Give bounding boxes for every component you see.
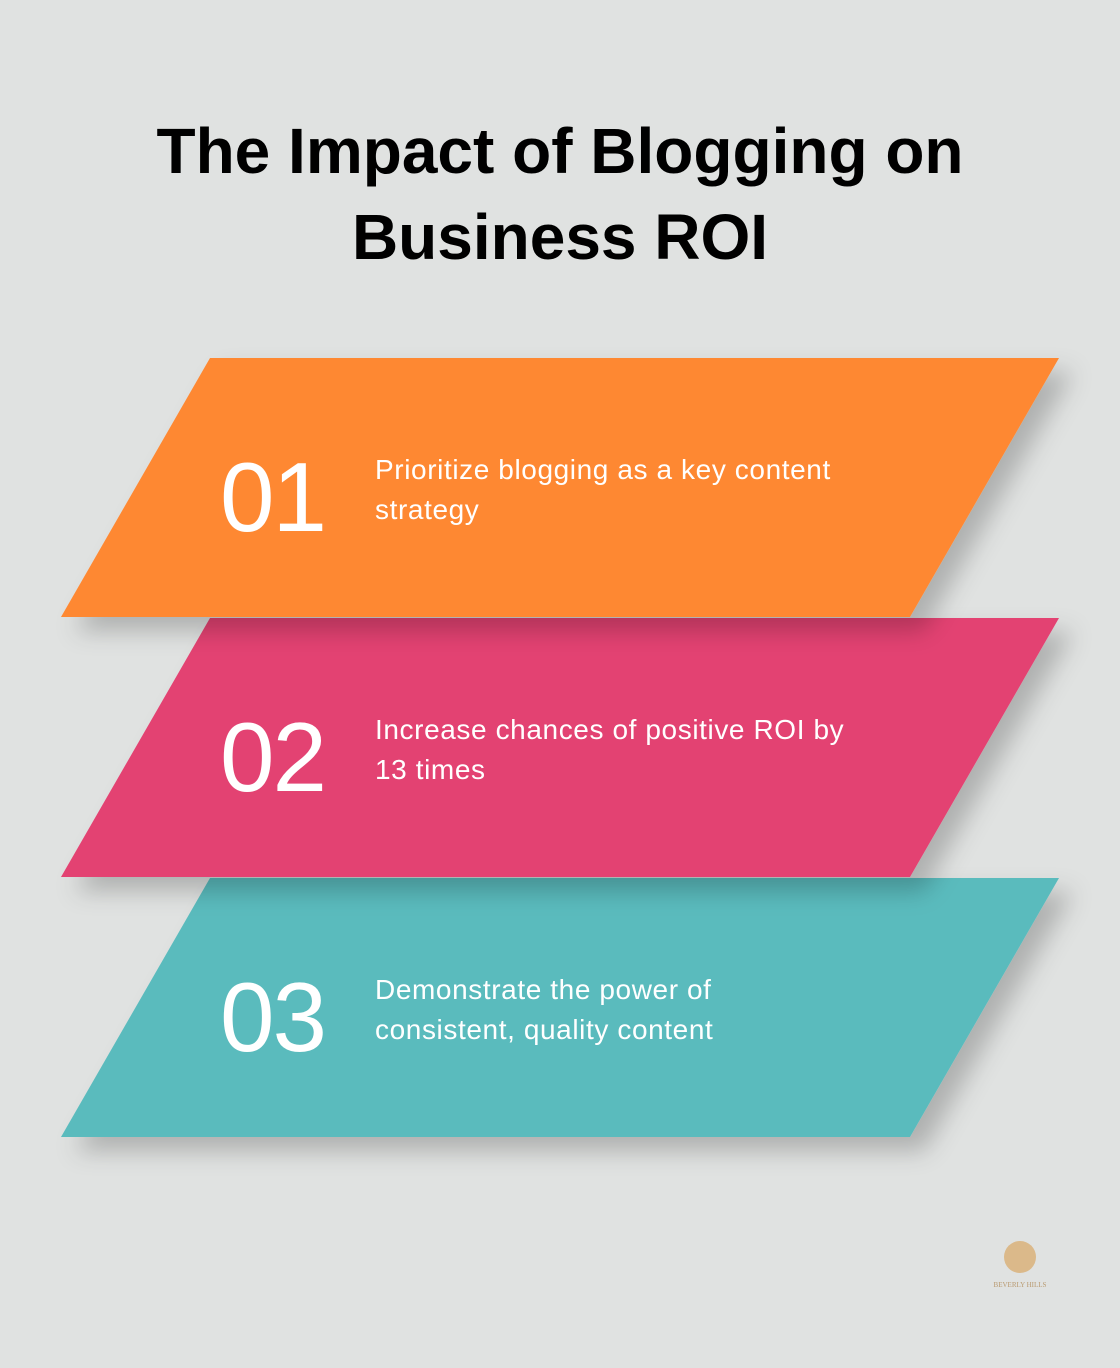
number 03: 03 xyxy=(220,962,325,1072)
logo xyxy=(994,1241,1047,1289)
band 2 xyxy=(61,618,1059,877)
title: Business ROI xyxy=(352,201,768,273)
text 02 xyxy=(375,714,844,785)
text 03: consistent, quality content xyxy=(375,1014,713,1045)
text 01: Prioritize blogging as a key content xyxy=(375,454,831,485)
band 3 xyxy=(61,878,1059,1137)
number 02: 02 xyxy=(220,702,325,812)
title xyxy=(156,115,964,273)
title: The Impact of Blogging on xyxy=(156,115,964,187)
logo: BEVERLY HILLS xyxy=(994,1281,1047,1289)
text 01: strategy xyxy=(375,494,479,525)
text 03 xyxy=(375,974,713,1045)
band 1 xyxy=(61,358,1059,617)
number 01: 01 xyxy=(220,442,325,552)
text 03: Demonstrate the power of xyxy=(375,974,712,1005)
text 02: 13 times xyxy=(375,754,486,785)
text 02: Increase chances of positive ROI by xyxy=(375,714,844,745)
text 01 xyxy=(375,454,831,525)
